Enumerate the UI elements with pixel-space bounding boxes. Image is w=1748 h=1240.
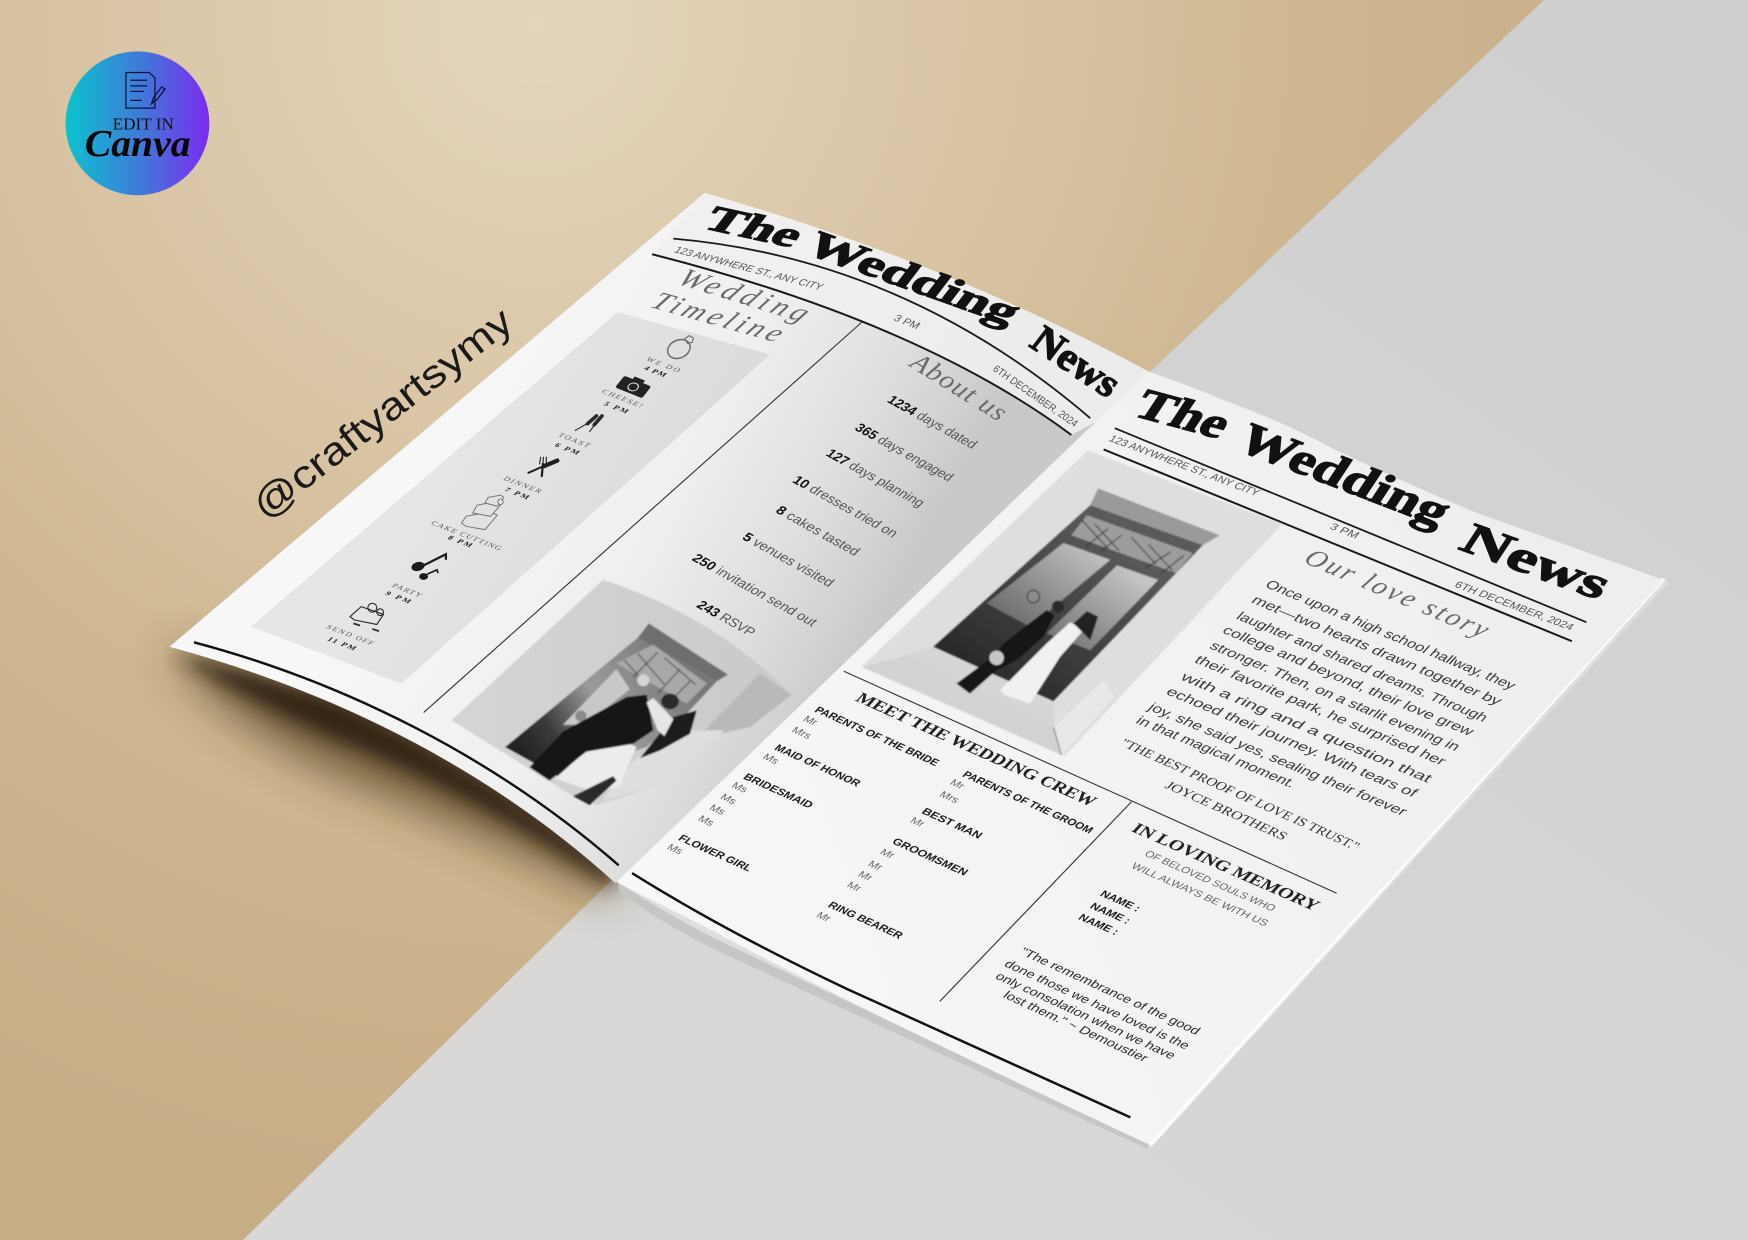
icon: fork and knife — [528, 457, 557, 476]
crew: best man: BEST MAN — [919, 807, 984, 841]
heading: The Wedding News (right) — [1124, 381, 1621, 609]
quote: Demoustier: done those we have loved is the — [1001, 957, 1193, 1052]
crew: bridesmaid: Ms — [695, 814, 717, 828]
quote: Demoustier — [992, 945, 1204, 1065]
badge text: edit in: EDIT IN — [113, 114, 174, 133]
timeline: toast — [553, 431, 593, 456]
text block: love story: in that magical moment. — [1132, 714, 1299, 791]
shadow under left page — [167, 649, 620, 898]
page stack under right page — [616, 578, 1669, 1151]
heading: meet the wedding crew: MEET THE WEDDING CREW — [852, 689, 1102, 810]
list: wedding stats: 365 days engaged — [852, 420, 957, 484]
photo: couple dip kiss — [451, 580, 792, 805]
crew: groomsmen: Mr — [844, 880, 864, 894]
quote: Joyce Brothers: "THE BEST PROOF OF LOVE IS TRUST." — [1117, 737, 1362, 853]
quote: Demoustier: "The remembrance of the good — [1017, 945, 1204, 1037]
crew: parents of the groom: PARENTS OF THE GROOM — [960, 770, 1095, 836]
crew: bridesmaid: Ms — [718, 792, 739, 807]
crew: bridesmaid — [695, 772, 815, 828]
man — [956, 610, 1055, 694]
text block: love story: joy, she said yes, sealing their forever — [1143, 700, 1410, 819]
timeline: we do: WE DO — [644, 356, 683, 374]
text block: love story: met—two hearts drawn together by — [1248, 594, 1506, 709]
list: wedding stats — [689, 392, 981, 639]
text: beloved souls: OF BELOVED SOULS WHO — [1142, 849, 1278, 914]
panel: timeline — [251, 312, 770, 684]
text block: love story: stronger. Then, on a starlit evening in — [1206, 639, 1463, 754]
crew: groomsmen: Mr — [855, 869, 875, 883]
icon: music notes — [410, 554, 446, 580]
photo: couple at doorway — [862, 451, 1282, 756]
crew: parents of the bride: Mrs — [789, 725, 814, 741]
timeline: dinner: 7 PM — [502, 486, 532, 501]
text block: love story: laughter and shared dreams. Through — [1233, 610, 1491, 725]
heading: The Wedding News (right): News — [1451, 515, 1621, 609]
rule: bottom right — [632, 873, 1130, 1117]
heading: Wedding Timeline: Timeline — [645, 288, 791, 348]
timeline: party: 9 PM — [383, 590, 414, 605]
names list: NAME : — [1097, 889, 1143, 914]
list: wedding stats: 5 venues visited — [739, 530, 838, 589]
panel: right page — [616, 371, 1663, 1144]
heading: Wedding Timeline — [645, 264, 816, 348]
crew: flower girl: FLOWER GIRL — [676, 833, 754, 874]
crew: parents of the bride: Mr — [800, 714, 820, 728]
text block: love story: Once upon a high school hallway, they — [1262, 578, 1520, 693]
timeline: cake cutting: CAKE CUTTING — [429, 520, 504, 552]
masthead: time: 3 PM — [1327, 522, 1361, 541]
heading: Wedding Timeline: Wedding — [671, 264, 816, 327]
masthead: address: 123 ANYWHERE ST., ANY CITY — [1106, 434, 1262, 499]
timeline: toast: 6 PM — [553, 442, 582, 456]
timeline: send off: SEND OFF — [324, 623, 377, 647]
list: wedding stats: 250 invitation send out — [689, 551, 821, 629]
list: wedding stats: 1234 days dated — [884, 392, 981, 451]
rule: bottom left — [194, 642, 619, 865]
heading: The Wedding News (left): Wedding — [797, 224, 1031, 333]
crew: groomsmen: Mr — [865, 859, 885, 873]
crew: groomsmen: Mr — [877, 847, 897, 861]
text: beloved souls: WILL ALWAYS BE WITH US — [1128, 861, 1271, 929]
quote: Demoustier: only consolation when we have — [992, 969, 1179, 1062]
woman — [1000, 622, 1084, 704]
text block: love story: their favorite park, he surprised her — [1191, 653, 1449, 768]
timeline: party — [383, 582, 425, 605]
handle: craftyartsymy: @craftyartsymy — [244, 299, 521, 528]
crew: bridesmaid: BRIDESMAID — [741, 772, 815, 811]
timeline: cake cutting: 8 PM — [446, 534, 475, 549]
heading: The Wedding News (right): The — [1124, 381, 1241, 448]
names list — [1076, 889, 1143, 937]
timeline: we do: 4 PM — [642, 365, 670, 379]
icon: camera — [615, 373, 653, 398]
heading: The Wedding News (left): News — [1022, 317, 1130, 406]
names list: NAME : — [1087, 901, 1133, 926]
crew: groomsmen: GROOMSMEN — [889, 837, 970, 878]
badge text: Canva: Canva — [85, 123, 191, 165]
icon: ring — [665, 336, 693, 362]
timeline: send off: 11 PM — [325, 636, 359, 652]
timeline: toast: TOAST — [556, 431, 593, 449]
crew: groomsmen — [844, 837, 970, 894]
crew: parents of the bride: PARENTS OF THE BRIDE — [812, 705, 942, 769]
heading: Our love story: Our love story — [1298, 544, 1497, 643]
masthead: date: 6TH DECEMBER, 2024 — [990, 363, 1080, 430]
text block: love story: college and beyond, their love grew — [1219, 624, 1478, 739]
heading: About us: About us — [903, 346, 1013, 426]
list: wedding stats: 10 dresses tried on — [789, 473, 902, 540]
crew: bridesmaid: Ms — [707, 803, 728, 817]
crew: ring bearer: RING BEARER — [825, 900, 905, 941]
crew: flower girl: Ms — [664, 842, 685, 857]
icon: document and pencil — [126, 72, 165, 108]
masthead: address: 123 ANYWHERE ST., ANY CITY — [672, 245, 826, 293]
text block: love story: with a ring and a question that — [1176, 670, 1435, 786]
quote: Demoustier: lost them." ~ Demoustier — [1000, 988, 1152, 1065]
text block: love story: echoed their journey. With tears of — [1162, 685, 1422, 801]
crew: ring bearer: Mr — [814, 910, 834, 924]
list: wedding stats: 8 cakes tasted — [773, 503, 864, 558]
crew: bridesmaid: Ms — [729, 780, 750, 795]
crew: parents of the groom: Mr — [947, 778, 967, 792]
timeline: dinner: DINNER — [501, 475, 545, 495]
heading: The Wedding News (left): The — [695, 199, 813, 255]
panel: wedding crew — [664, 689, 1102, 941]
badge: edit in Canva — [66, 51, 209, 195]
text block: love story — [1132, 578, 1520, 819]
timeline: cheese: CHEESE! — [599, 388, 645, 409]
list: wedding stats: 127 days planning — [823, 446, 928, 510]
quote: Joyce Brothers: JOYCE BROTHERS — [1161, 779, 1290, 843]
panel: in loving memory — [992, 819, 1325, 1065]
heading: The Wedding News (right): Wedding — [1228, 414, 1461, 536]
icon: getaway car — [350, 603, 383, 631]
masthead: date: 6TH DECEMBER, 2024 — [1452, 580, 1576, 633]
timeline: party: PARTY — [390, 582, 425, 599]
panel: left page — [169, 193, 1148, 883]
timeline: cheese: 5 PM — [602, 400, 631, 415]
crew: maid of honor: MAID OF HONOR — [772, 743, 863, 789]
list: wedding stats: 243 RSVP — [694, 598, 759, 639]
heading: in loving memory: IN LOVING MEMORY — [1128, 819, 1325, 914]
crew: parents of the groom: Mrs — [937, 789, 961, 806]
crew: maid of honor: Ms — [760, 752, 781, 766]
icon: cake — [462, 495, 504, 530]
masthead: time: 3 PM — [891, 313, 922, 332]
names list: NAME : — [1076, 912, 1121, 937]
crew: best man: Mr — [908, 815, 927, 829]
icon: champagne glasses — [575, 416, 602, 432]
heading: The Wedding News (left) — [695, 199, 1130, 406]
